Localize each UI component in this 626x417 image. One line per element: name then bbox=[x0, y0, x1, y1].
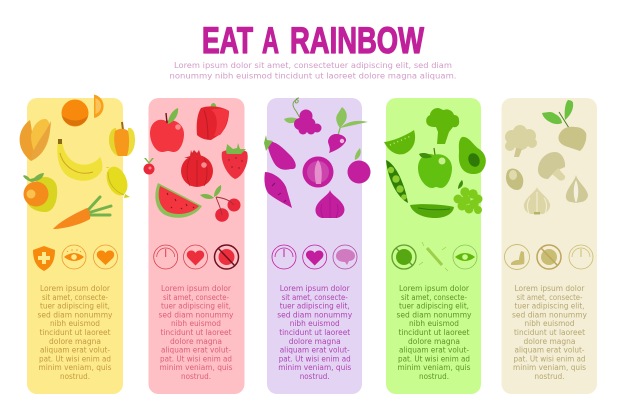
body text: purple: nibh euismod bbox=[290, 319, 340, 328]
panel: pink bbox=[144, 98, 248, 394]
icon: eggplant bbox=[264, 135, 296, 170]
icon: no germ bbox=[537, 245, 561, 269]
subtitle bbox=[170, 60, 456, 80]
icon: no germ bbox=[392, 245, 416, 269]
body text: beige: nostrud. bbox=[534, 372, 564, 381]
icon: heart bbox=[94, 245, 118, 269]
title: A bbox=[262, 20, 279, 61]
body text: beige: sed diam nonummy bbox=[512, 310, 587, 319]
body text: beige: dolore magna bbox=[524, 337, 576, 346]
body text: green: sed diam nonummy bbox=[396, 310, 472, 319]
body text: pink: Lorem ipsum dolor bbox=[161, 284, 232, 293]
body text: purple: Lorem ipsum dolor bbox=[280, 284, 351, 293]
body text: pink: pat. Ut wisi enim ad bbox=[160, 354, 232, 363]
icon: turnip bbox=[542, 100, 586, 151]
panel: green bbox=[384, 98, 486, 394]
icon: mushroom bbox=[538, 152, 565, 181]
icon: orange slice bbox=[94, 94, 104, 118]
body text: yellow: nibh euismod bbox=[50, 319, 100, 328]
icon: red pepper bbox=[197, 103, 229, 140]
icon: gauge bbox=[569, 245, 593, 269]
body text: purple: tuer adipiscing elit, bbox=[280, 302, 350, 311]
icon: carrot bbox=[53, 197, 111, 229]
icon: cauliflower bbox=[505, 125, 537, 157]
icon: sweet potato bbox=[264, 172, 292, 208]
body text: pink: dolore magna bbox=[170, 337, 222, 346]
icon: lemon bbox=[103, 164, 131, 198]
icon: avocado bbox=[459, 137, 486, 174]
icon: bean bbox=[506, 169, 523, 190]
body text: green: tincidunt ut laoreet bbox=[398, 328, 470, 337]
icon: apple bbox=[150, 108, 184, 152]
body text: pink: nostrud. bbox=[181, 372, 211, 381]
icon: plum bbox=[348, 148, 370, 184]
title: EAT bbox=[202, 20, 253, 61]
body text: green: minim veniam, quis bbox=[398, 363, 471, 372]
icon: heart bbox=[303, 245, 327, 269]
body text: purple: dolore magna bbox=[289, 337, 341, 346]
icon: no germ bbox=[214, 245, 238, 269]
icon: yellow pepper bbox=[109, 122, 135, 156]
subtitle: Lorem ipsum dolor sit amet, consectetuer adipiscing elit, sed diam bbox=[174, 60, 452, 70]
body text: pink: tincidunt ut laoreet bbox=[160, 328, 232, 337]
body text: yellow: minim veniam, quis bbox=[38, 363, 112, 372]
icon: beet bbox=[328, 107, 368, 153]
body text: purple: pat. Ut wisi enim ad bbox=[279, 354, 351, 363]
title: RAINBOW bbox=[290, 20, 424, 61]
body text: yellow: pat. Ut wisi enim ad bbox=[39, 354, 111, 363]
body text: beige: tincidunt ut laoreet bbox=[514, 328, 585, 337]
icon: strawberry bbox=[222, 143, 248, 179]
body text: yellow: sed diam nonummy bbox=[38, 310, 113, 319]
body text: beige bbox=[512, 284, 587, 381]
body text: purple: tincidunt ut laoreet bbox=[279, 328, 350, 337]
body text: pink bbox=[158, 284, 234, 381]
body text: beige: sit amet, consecte- bbox=[516, 293, 583, 302]
body text: pink: aliquam erat volut- bbox=[161, 346, 231, 355]
icon: green apple bbox=[418, 148, 452, 188]
icon: cucumber bbox=[410, 204, 454, 218]
icon: pomegranate bbox=[181, 150, 213, 187]
icon: orange bbox=[62, 100, 88, 126]
icon: shield bbox=[33, 246, 55, 271]
icon: purple grapes bbox=[284, 98, 322, 134]
body text: purple: aliquam erat volut- bbox=[280, 346, 350, 355]
body text: yellow: nostrud. bbox=[60, 372, 90, 381]
icon: cherries bbox=[200, 185, 240, 222]
body text: beige: nibh euismod bbox=[524, 319, 575, 328]
body text: beige: aliquam erat volut- bbox=[514, 346, 585, 355]
icon: green grapes bbox=[454, 180, 482, 214]
body text: green: Lorem ipsum dolor bbox=[399, 284, 470, 293]
body text: pink: nibh euismod bbox=[171, 319, 221, 328]
body text: yellow: tincidunt ut laoreet bbox=[40, 328, 111, 337]
body text: purple bbox=[277, 284, 353, 381]
body text: green: sit amet, consecte- bbox=[401, 293, 467, 302]
body text: purple: nostrud. bbox=[300, 372, 330, 381]
body text: green: pat. Ut wisi enim ad bbox=[398, 354, 470, 363]
body text: pink: sit amet, consecte- bbox=[163, 293, 229, 302]
icon: banana bbox=[57, 139, 102, 181]
icon: small berry bbox=[144, 158, 154, 174]
panel: yellow bbox=[20, 94, 135, 394]
body text: yellow: Lorem ipsum dolor bbox=[40, 284, 111, 293]
icon: eye bbox=[453, 245, 477, 269]
icon: garlic bbox=[566, 175, 588, 203]
icon: peach bbox=[23, 173, 57, 212]
body text: yellow bbox=[38, 284, 113, 381]
body text: pink: tuer adipiscing elit, bbox=[161, 302, 231, 311]
body text: yellow: aliquam erat volut- bbox=[40, 346, 110, 355]
icon: eye bbox=[62, 245, 86, 269]
body text: green bbox=[396, 284, 472, 381]
icon: broccoli bbox=[426, 108, 459, 144]
body text: green: tuer adipiscing elit, bbox=[399, 302, 469, 311]
body text: green: dolore magna bbox=[408, 337, 460, 346]
body text: purple: sit amet, consecte- bbox=[282, 293, 348, 302]
body text: green: nostrud. bbox=[419, 372, 449, 381]
body text: green: nibh euismod bbox=[409, 319, 459, 328]
body text: beige: Lorem ipsum dolor bbox=[514, 284, 585, 293]
body text: beige: tuer adipiscing elit, bbox=[514, 302, 584, 311]
panel: beige bbox=[502, 98, 597, 394]
body text: yellow: tuer adipiscing elit, bbox=[40, 302, 110, 311]
icon: kiwi bbox=[384, 130, 415, 154]
icon: gauge bbox=[272, 245, 296, 269]
icon: gauge bbox=[154, 245, 178, 269]
panel: purple bbox=[264, 98, 370, 394]
icon: corn bbox=[20, 119, 51, 161]
title bbox=[202, 20, 424, 61]
body text: yellow: dolore magna bbox=[49, 337, 101, 346]
body text: purple: minim veniam, quis bbox=[278, 363, 351, 372]
icon: purple onion bbox=[315, 190, 344, 218]
body text: yellow: sit amet, consecte- bbox=[42, 293, 108, 302]
icon: brain bbox=[333, 245, 357, 269]
icon: peas bbox=[386, 160, 408, 203]
icon: bone bbox=[419, 242, 448, 271]
icon: white onion bbox=[524, 187, 550, 214]
body text: pink: minim veniam, quis bbox=[160, 363, 233, 372]
body text: beige: pat. Ut wisi enim ad bbox=[514, 354, 586, 363]
icon: muscle bbox=[504, 244, 530, 270]
icon: heart bbox=[184, 245, 208, 269]
body text: green: aliquam erat volut- bbox=[399, 346, 469, 355]
body text: pink: sed diam nonummy bbox=[158, 310, 234, 319]
body text: beige: minim veniam, quis bbox=[513, 363, 586, 372]
subtitle: nonummy nibh euismod tincidunt ut laoreet dolore magna aliquam. bbox=[170, 70, 456, 80]
body text: purple: sed diam nonummy bbox=[277, 310, 353, 319]
icon: red cabbage bbox=[302, 156, 334, 188]
icon: watermelon bbox=[155, 183, 202, 218]
